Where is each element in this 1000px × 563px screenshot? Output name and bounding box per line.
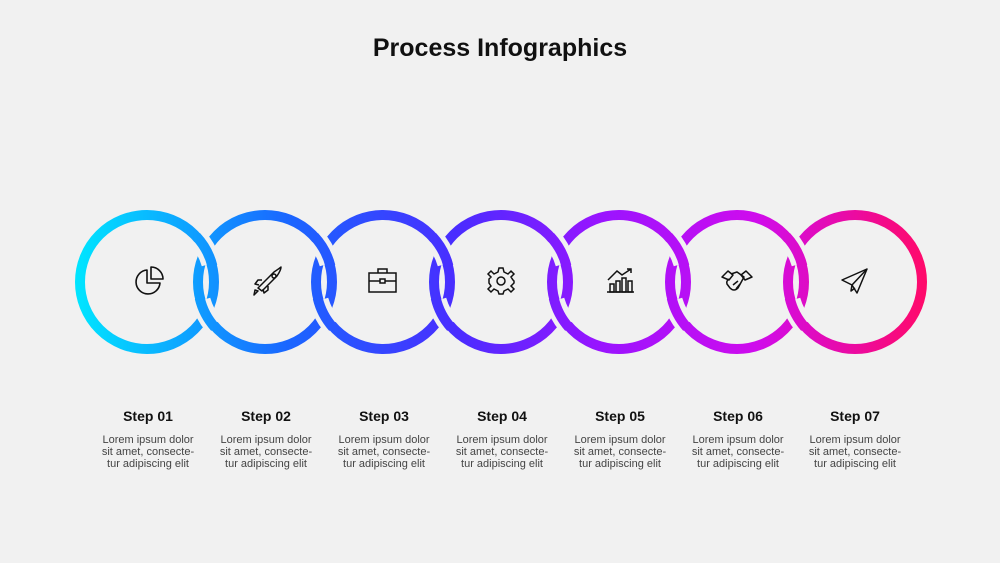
step 01 text: Lorem ipsum dolor	[102, 434, 194, 446]
icon: rocket	[254, 267, 281, 295]
step 03 text: Lorem ipsum dolor	[338, 434, 430, 446]
step 02 text	[220, 408, 312, 470]
icon: paper plane	[842, 269, 867, 293]
step 03 text	[338, 408, 430, 470]
step 06 text	[692, 408, 784, 470]
step 03 text: Step 03	[359, 408, 409, 424]
step 01 text	[102, 408, 194, 470]
step 04 text: tur adipiscing elit	[461, 458, 543, 470]
step 05 text: Step 05	[595, 408, 645, 424]
step 06 text: Lorem ipsum dolor	[692, 434, 784, 446]
step 03 text: sit amet, consecte-	[338, 446, 430, 458]
step 02 text: tur adipiscing elit	[225, 458, 307, 470]
step 05 text	[574, 408, 666, 470]
step 06 text: sit amet, consecte-	[692, 446, 784, 458]
step 05 text: Lorem ipsum dolor	[574, 434, 666, 446]
step 01 text: sit amet, consecte-	[102, 446, 194, 458]
icon: pie chart	[136, 267, 163, 294]
title: Process Infographics	[373, 34, 627, 62]
step 01 text: tur adipiscing elit	[107, 458, 189, 470]
step 07 text	[809, 408, 901, 470]
step 04 text: sit amet, consecte-	[456, 446, 548, 458]
step 01 text: Step 01	[123, 408, 173, 424]
icon: gear	[488, 268, 514, 294]
step 04 text: Step 04	[477, 408, 527, 424]
step 07 text: Lorem ipsum dolor	[809, 434, 901, 446]
icon: handshake	[722, 271, 752, 290]
icon: growth chart	[607, 269, 634, 292]
step 02 text: sit amet, consecte-	[220, 446, 312, 458]
step 02 text: Lorem ipsum dolor	[220, 434, 312, 446]
step 03 text: tur adipiscing elit	[343, 458, 425, 470]
step 04 text: Lorem ipsum dolor	[456, 434, 548, 446]
step 07 text: tur adipiscing elit	[814, 458, 896, 470]
icon: briefcase	[369, 269, 396, 292]
step 05 text: sit amet, consecte-	[574, 446, 666, 458]
step 06 text: Step 06	[713, 408, 763, 424]
step 07 text: sit amet, consecte-	[809, 446, 901, 458]
step 05 text: tur adipiscing elit	[579, 458, 661, 470]
step 02 text: Step 02	[241, 408, 291, 424]
step 06 text: tur adipiscing elit	[697, 458, 779, 470]
step 07 text: Step 07	[830, 408, 880, 424]
step 04 text	[456, 408, 548, 470]
